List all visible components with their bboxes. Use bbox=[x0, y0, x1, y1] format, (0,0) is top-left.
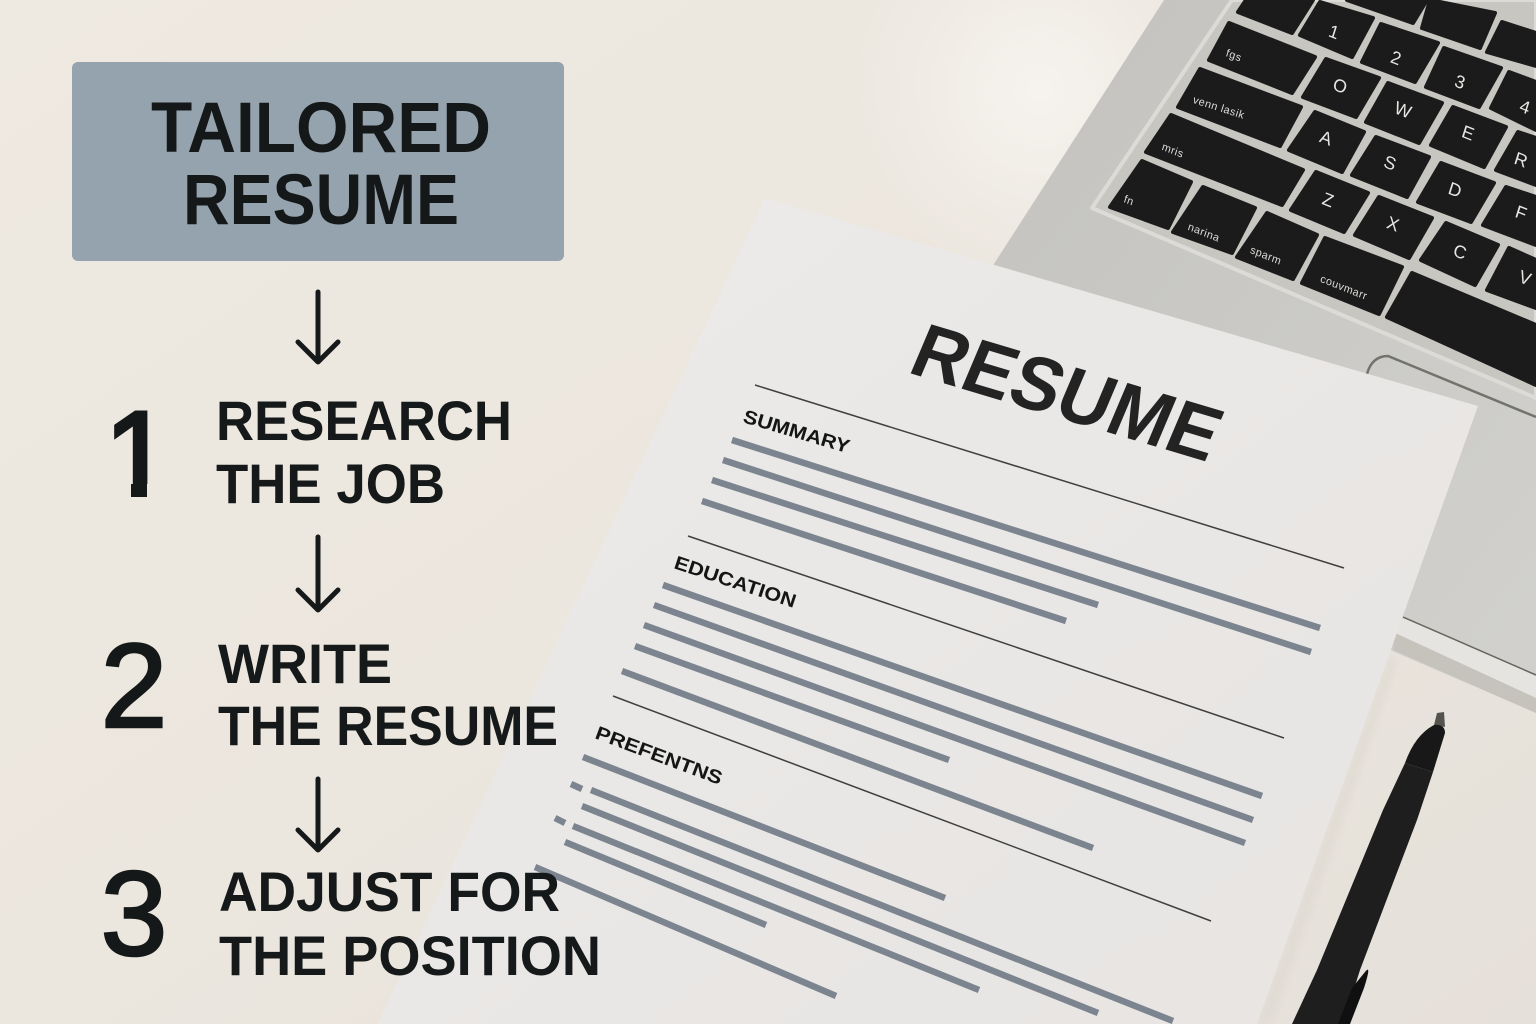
keyboard recess bbox=[1092, 0, 1536, 398]
keyboard legends: 2 bbox=[1388, 47, 1404, 69]
keyboard legends: sparm bbox=[1249, 244, 1283, 268]
arrow: step 1 to step 2 bbox=[298, 537, 338, 610]
title text bbox=[151, 89, 491, 240]
keyboard legends: E bbox=[1459, 121, 1477, 145]
keyboard legends: C bbox=[1451, 240, 1469, 264]
keyboard legends: 3 bbox=[1452, 71, 1468, 93]
keyboard legends: D bbox=[1446, 178, 1464, 202]
keyboard legends: couvmarr bbox=[1319, 273, 1369, 303]
step 2: WRITE bbox=[218, 632, 392, 695]
title text: TAILORED bbox=[151, 89, 491, 168]
step 3: 3 bbox=[101, 847, 167, 981]
keyboard legends: A bbox=[1317, 126, 1335, 150]
step 3: ADJUST FOR bbox=[219, 860, 560, 923]
keyboard legends: S bbox=[1381, 151, 1399, 175]
step 3 bbox=[101, 847, 601, 987]
arrow: title to step 1 bbox=[298, 292, 338, 362]
step 3: THE POSITION bbox=[219, 924, 601, 987]
keyboard legends: 4 bbox=[1517, 96, 1533, 118]
step 1: 1 bbox=[105, 387, 171, 521]
laptop bbox=[990, 0, 1536, 713]
step 2: THE RESUME bbox=[218, 694, 558, 757]
step 1 bbox=[114, 401, 508, 504]
prefentns section bbox=[535, 696, 1211, 1021]
keyboard keys bbox=[1110, 0, 1536, 385]
step 1: THE JOB bbox=[216, 452, 445, 515]
keyboard legends: X bbox=[1384, 212, 1402, 236]
step 2: 2 bbox=[101, 619, 167, 753]
arrow: step 2 to step 3 bbox=[298, 779, 338, 850]
keyboard legends: W bbox=[1392, 97, 1414, 123]
resume sheet bbox=[378, 198, 1478, 1024]
summary section bbox=[702, 385, 1344, 652]
keyboard legends: V bbox=[1516, 266, 1534, 290]
paper shadow bbox=[1257, 655, 1398, 1024]
keyboard legends: mris bbox=[1160, 141, 1185, 161]
keyboard legends: fn bbox=[1122, 193, 1135, 209]
keyboard legends: 1 bbox=[1326, 21, 1342, 43]
step 1: RESEARCH bbox=[216, 389, 512, 452]
keyboard legends bbox=[1122, 21, 1534, 303]
education section: EDUCATION bbox=[671, 553, 799, 613]
education section bbox=[622, 536, 1284, 848]
title box bbox=[72, 62, 564, 261]
keyboard legends: narina bbox=[1186, 221, 1221, 245]
laptop front edge bbox=[1395, 617, 1536, 698]
pen bbox=[1292, 712, 1445, 1024]
trackpad bbox=[1367, 356, 1536, 417]
step 2 bbox=[101, 619, 558, 757]
keyboard legends: R bbox=[1512, 148, 1530, 172]
prefentns section: PREFENTNS bbox=[592, 723, 725, 790]
keyboard legends: F bbox=[1513, 201, 1529, 225]
keyboard legends: Z bbox=[1320, 188, 1336, 212]
keyboard legends: fgs bbox=[1224, 47, 1243, 65]
keyboard legends: venn lasik bbox=[1191, 94, 1246, 122]
summary section: SUMMARY bbox=[741, 407, 852, 458]
resume title: RESUME bbox=[899, 308, 1235, 478]
keyboard legends: O bbox=[1330, 74, 1350, 98]
title text: RESUME bbox=[183, 161, 459, 240]
